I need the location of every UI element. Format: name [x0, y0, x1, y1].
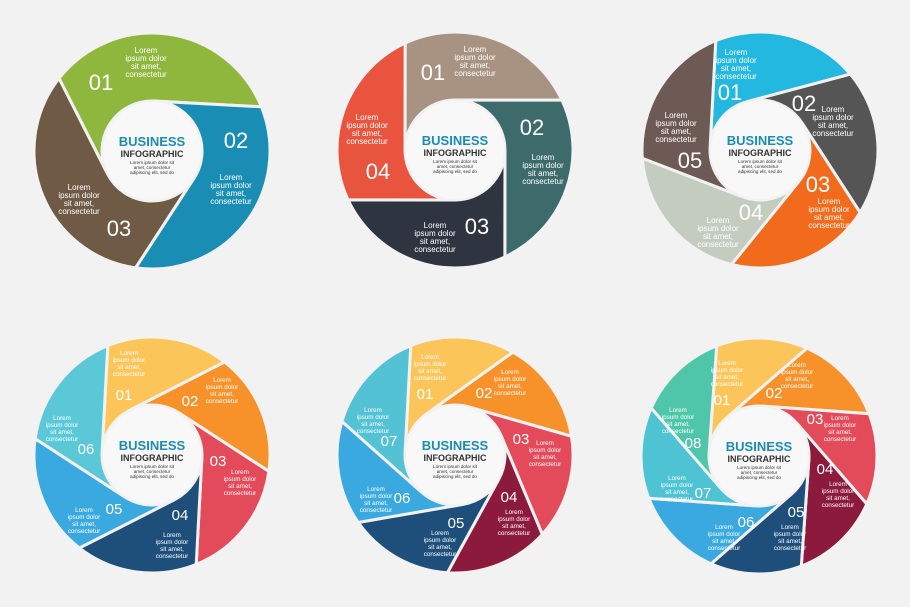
center label: [422, 438, 489, 479]
step 04: sit amet,: [703, 232, 733, 241]
step 05: consectetur: [655, 135, 697, 144]
step 05: ipsum dolor: [774, 531, 806, 538]
step 04: [817, 461, 854, 509]
step 04: 04: [172, 507, 188, 524]
step 02: consectetur: [522, 177, 564, 186]
step 02: consectetur: [812, 129, 854, 138]
center label: adipiscing elit, sed do: [433, 169, 477, 174]
step 03: ipsum dolor: [58, 191, 100, 200]
step 04: 04: [817, 461, 833, 478]
step 06: ipsum dolor: [708, 531, 740, 538]
step 04: consectetur: [822, 502, 854, 509]
step 03: consectetur: [414, 245, 456, 254]
step 05: 05: [788, 504, 804, 521]
step 05: 05: [448, 515, 464, 532]
center label: Lorem ipsum dolor sit: [738, 159, 783, 164]
center label: Lorem ipsum dolor sit: [130, 464, 175, 469]
step 07: [357, 407, 397, 450]
step 01: consectetur: [414, 375, 446, 382]
step 04: ipsum dolor: [822, 488, 854, 495]
step 01: Lorem: [464, 45, 487, 54]
step 05: sit amet,: [778, 538, 802, 545]
step 02: [210, 128, 252, 206]
step 06: [360, 486, 410, 514]
step 01: ipsum dolor: [454, 53, 496, 62]
step 02: Lorem: [822, 105, 845, 114]
step 02: [520, 115, 564, 186]
step 03: sit amet,: [533, 454, 557, 461]
step 04: Lorem: [707, 216, 730, 225]
step 03: ipsum dolor: [824, 422, 856, 429]
step 01: [113, 350, 145, 404]
step 03: sit amet,: [228, 483, 252, 490]
step 07: consectetur: [357, 428, 389, 435]
step 02: ipsum dolor: [812, 113, 854, 122]
step 05: consectetur: [68, 528, 100, 535]
step 06: sit amet,: [364, 500, 388, 507]
step 05: ipsum dolor: [68, 514, 100, 521]
center label: [119, 134, 186, 175]
step 01: [421, 45, 496, 85]
center label: amet, consectetur: [134, 165, 171, 170]
center label: Lorem ipsum dolor sit: [130, 160, 175, 165]
step 03: 03: [107, 216, 131, 241]
step 08: sit amet,: [666, 421, 690, 428]
step 05: sit amet,: [661, 127, 691, 136]
panel: 3-step cycle: [19, 0, 306, 283]
center label: [119, 438, 186, 479]
step 03: sit amet,: [814, 213, 844, 222]
step 08: [662, 407, 701, 452]
center label: adipiscing elit, sed do: [130, 170, 174, 175]
step 01: ipsum dolor: [414, 361, 446, 368]
step 04: [156, 507, 188, 560]
step 06: Lorem: [715, 524, 733, 531]
step 02: ipsum dolor: [494, 376, 526, 383]
step 02: [182, 377, 238, 410]
center label: amet, consectetur: [741, 470, 778, 475]
step 04: 04: [739, 200, 763, 225]
center label: [727, 133, 794, 174]
step 01: Lorem: [718, 360, 736, 367]
step 01: consectetur: [125, 70, 167, 79]
step 06: 06: [738, 514, 754, 531]
step 01: [711, 360, 743, 409]
step 07: Lorem: [668, 475, 686, 482]
step 04: sit amet,: [826, 495, 850, 502]
step 02: 02: [182, 393, 198, 410]
step 01: consectetur: [454, 69, 496, 78]
step 05: ipsum dolor: [655, 119, 697, 128]
step 01: sit amet,: [460, 61, 490, 70]
step 06: consectetur: [360, 507, 392, 514]
step 04: 04: [366, 159, 390, 184]
step 01: [89, 46, 167, 95]
step 06: consectetur: [46, 436, 78, 443]
step 06: ipsum dolor: [360, 493, 392, 500]
step 03: ipsum dolor: [414, 229, 456, 238]
step 01: sit amet,: [131, 62, 161, 71]
step 02: Lorem: [213, 377, 231, 384]
step 04: sit amet,: [352, 129, 382, 138]
step 04: Lorem: [829, 481, 847, 488]
center label: adipiscing elit, sed do: [737, 475, 781, 480]
step 02: ipsum dolor: [206, 384, 238, 391]
step 02: Lorem: [532, 153, 555, 162]
step 03: sit amet,: [64, 199, 94, 208]
step 01: 01: [89, 70, 113, 95]
step 04: ipsum dolor: [346, 121, 388, 130]
step 06: 06: [78, 441, 94, 458]
step 02: 02: [476, 385, 492, 402]
step 08: 08: [685, 435, 701, 452]
step 03: sit amet,: [420, 237, 450, 246]
step 05: [774, 504, 806, 552]
step 03: ipsum dolor: [529, 447, 561, 454]
step 02: 02: [766, 385, 782, 402]
step 03: [806, 172, 850, 230]
step 03: 03: [806, 172, 830, 197]
panel: 6-step cycle: [0, 307, 305, 603]
step 03: 03: [210, 453, 226, 470]
step 07: 07: [381, 433, 397, 450]
step 07: [661, 475, 711, 503]
center label: BUSINESS: [422, 133, 489, 148]
step 03: [807, 411, 856, 443]
step 03: Lorem: [818, 197, 841, 206]
step 04: sit amet,: [502, 523, 526, 530]
step 03: [513, 431, 561, 468]
step 05: [424, 515, 464, 558]
step 01: ipsum dolor: [711, 367, 743, 374]
step 01: sit amet,: [715, 374, 739, 381]
step 03: 03: [465, 214, 489, 239]
step 01: ipsum dolor: [113, 357, 145, 364]
step 01: Lorem: [725, 48, 748, 57]
center label: adipiscing elit, sed do: [738, 169, 782, 174]
step 05: consectetur: [774, 545, 806, 552]
center label: INFOGRAPHIC: [120, 149, 184, 159]
step 05: consectetur: [424, 551, 456, 558]
step 01: ipsum dolor: [715, 56, 757, 65]
step 02: 02: [520, 115, 544, 140]
center label: BUSINESS: [119, 438, 186, 453]
step 07: 07: [695, 485, 711, 502]
center label: [726, 439, 793, 480]
step 08: Lorem: [669, 407, 687, 414]
step 01: Lorem: [120, 350, 138, 357]
step 04: consectetur: [697, 240, 739, 249]
step 02: sit amet,: [818, 121, 848, 130]
center label: amet, consectetur: [437, 164, 474, 169]
center label: INFOGRAPHIC: [728, 148, 792, 158]
step 06: consectetur: [708, 545, 740, 552]
step 01: [715, 48, 757, 105]
step 05: [68, 501, 122, 535]
step 02: consectetur: [494, 390, 526, 397]
center label: INFOGRAPHIC: [728, 454, 791, 464]
step 01: 01: [718, 80, 742, 105]
center label: amet, consectetur: [134, 469, 171, 474]
step 04: consectetur: [498, 530, 530, 537]
step 02: consectetur: [206, 398, 238, 405]
step 01: ipsum dolor: [125, 54, 167, 63]
center label: amet, consectetur: [742, 164, 779, 169]
step 01: 01: [417, 386, 433, 403]
step 01: 01: [116, 387, 132, 404]
step 05: ipsum dolor: [424, 537, 456, 544]
step 07: ipsum dolor: [357, 414, 389, 421]
step 08: consectetur: [662, 428, 694, 435]
center label: BUSINESS: [727, 133, 794, 148]
panel: 8-step cycle: [619, 316, 899, 596]
panel: 4-step cycle: [298, 0, 612, 307]
step 05: Lorem: [665, 111, 688, 120]
step 04: ipsum dolor: [697, 224, 739, 233]
step 01: sit amet,: [418, 368, 442, 375]
step 04: Lorem: [505, 509, 523, 516]
center label: adipiscing elit, sed do: [433, 474, 477, 479]
step 04: Lorem: [163, 532, 181, 539]
step 03: Lorem: [831, 415, 849, 422]
step 02: sit amet,: [785, 376, 809, 383]
step 03: [414, 214, 489, 254]
step 02: [476, 369, 526, 402]
step 04: ipsum dolor: [156, 539, 188, 546]
step 03: ipsum dolor: [808, 205, 850, 214]
step 01: [414, 354, 446, 403]
step 05: Lorem: [75, 507, 93, 514]
step 03: [58, 183, 131, 241]
step 02: [792, 91, 854, 138]
step 05: 05: [106, 501, 122, 518]
step 02: 02: [224, 128, 248, 153]
step 05: sit amet,: [428, 544, 452, 551]
step 02: ipsum dolor: [210, 181, 252, 190]
panel: 7-step cycle: [305, 311, 593, 603]
step 06: ipsum dolor: [46, 422, 78, 429]
step 04: ipsum dolor: [498, 516, 530, 523]
step 04: [697, 200, 763, 249]
center label: BUSINESS: [422, 438, 489, 453]
step 02: [766, 362, 813, 402]
step 06: sit amet,: [50, 429, 74, 436]
step 01: consectetur: [113, 371, 145, 378]
step 07: sit amet,: [361, 421, 385, 428]
step 06: Lorem: [53, 415, 71, 422]
step 02: Lorem: [220, 173, 243, 182]
panel: 5-step cycle: [623, 0, 910, 308]
step 01: consectetur: [711, 381, 743, 388]
step 02: sit amet,: [528, 169, 558, 178]
step 01: consectetur: [715, 72, 757, 81]
center label: INFOGRAPHIC: [424, 148, 487, 158]
step 02: 02: [792, 91, 816, 116]
step 02: ipsum dolor: [781, 369, 813, 376]
step 03: ipsum dolor: [224, 476, 256, 483]
step 03: [210, 453, 256, 497]
center label: Lorem ipsum dolor sit: [433, 159, 478, 164]
step 02: consectetur: [781, 383, 813, 390]
step 03: 03: [807, 411, 823, 428]
step 02: sit amet,: [498, 383, 522, 390]
center label: adipiscing elit, sed do: [130, 474, 174, 479]
step 03: consectetur: [824, 436, 856, 443]
step 07: Lorem: [364, 407, 382, 414]
step 06: 06: [394, 490, 410, 507]
step 03: Lorem: [536, 440, 554, 447]
step 03: 03: [513, 431, 529, 448]
step 06: [46, 415, 94, 458]
step 02: sit amet,: [210, 391, 234, 398]
step 03: Lorem: [424, 221, 447, 230]
step 01: Lorem: [135, 46, 158, 55]
step 03: consectetur: [529, 461, 561, 468]
step 04: [346, 113, 390, 184]
step 05: Lorem: [781, 524, 799, 531]
step 06: [708, 514, 754, 552]
step 03: Lorem: [68, 183, 91, 192]
step 05: [655, 111, 702, 173]
step 04: [498, 489, 530, 537]
center label: BUSINESS: [119, 134, 186, 149]
step 02: consectetur: [210, 197, 252, 206]
center label: [422, 133, 489, 174]
center label: INFOGRAPHIC: [424, 453, 487, 463]
step 07: ipsum dolor: [661, 482, 693, 489]
center label: BUSINESS: [726, 439, 793, 454]
step 03: consectetur: [224, 490, 256, 497]
step 08: ipsum dolor: [662, 414, 694, 421]
step 04: consectetur: [346, 137, 388, 146]
step 03: consectetur: [808, 221, 850, 230]
step 04: 04: [501, 489, 517, 506]
step 07: sit amet,: [665, 489, 689, 496]
step 02: Lorem: [501, 369, 519, 376]
step 04: Lorem: [356, 113, 379, 122]
step 07: consectetur: [661, 496, 693, 503]
step 01: sit amet,: [721, 64, 751, 73]
step 01: 01: [421, 60, 445, 85]
step 05: Lorem: [431, 530, 449, 537]
center label: Lorem ipsum dolor sit: [433, 464, 478, 469]
step 06: sit amet,: [712, 538, 736, 545]
step 03: consectetur: [58, 207, 100, 216]
step 01: sit amet,: [117, 364, 141, 371]
step 03: sit amet,: [828, 429, 852, 436]
step 02: sit amet,: [216, 189, 246, 198]
step 04: consectetur: [156, 553, 188, 560]
step 05: 05: [678, 148, 702, 173]
step 02: ipsum dolor: [522, 161, 564, 170]
step 05: sit amet,: [72, 521, 96, 528]
step 03: Lorem: [231, 469, 249, 476]
center label: INFOGRAPHIC: [120, 453, 184, 463]
step 01: Lorem: [421, 354, 439, 361]
step 02: Lorem: [788, 362, 806, 369]
step 04: sit amet,: [160, 546, 184, 553]
step 01: 01: [714, 392, 730, 409]
center label: amet, consectetur: [437, 469, 474, 474]
center label: Lorem ipsum dolor sit: [737, 465, 782, 470]
step 06: Lorem: [367, 486, 385, 493]
